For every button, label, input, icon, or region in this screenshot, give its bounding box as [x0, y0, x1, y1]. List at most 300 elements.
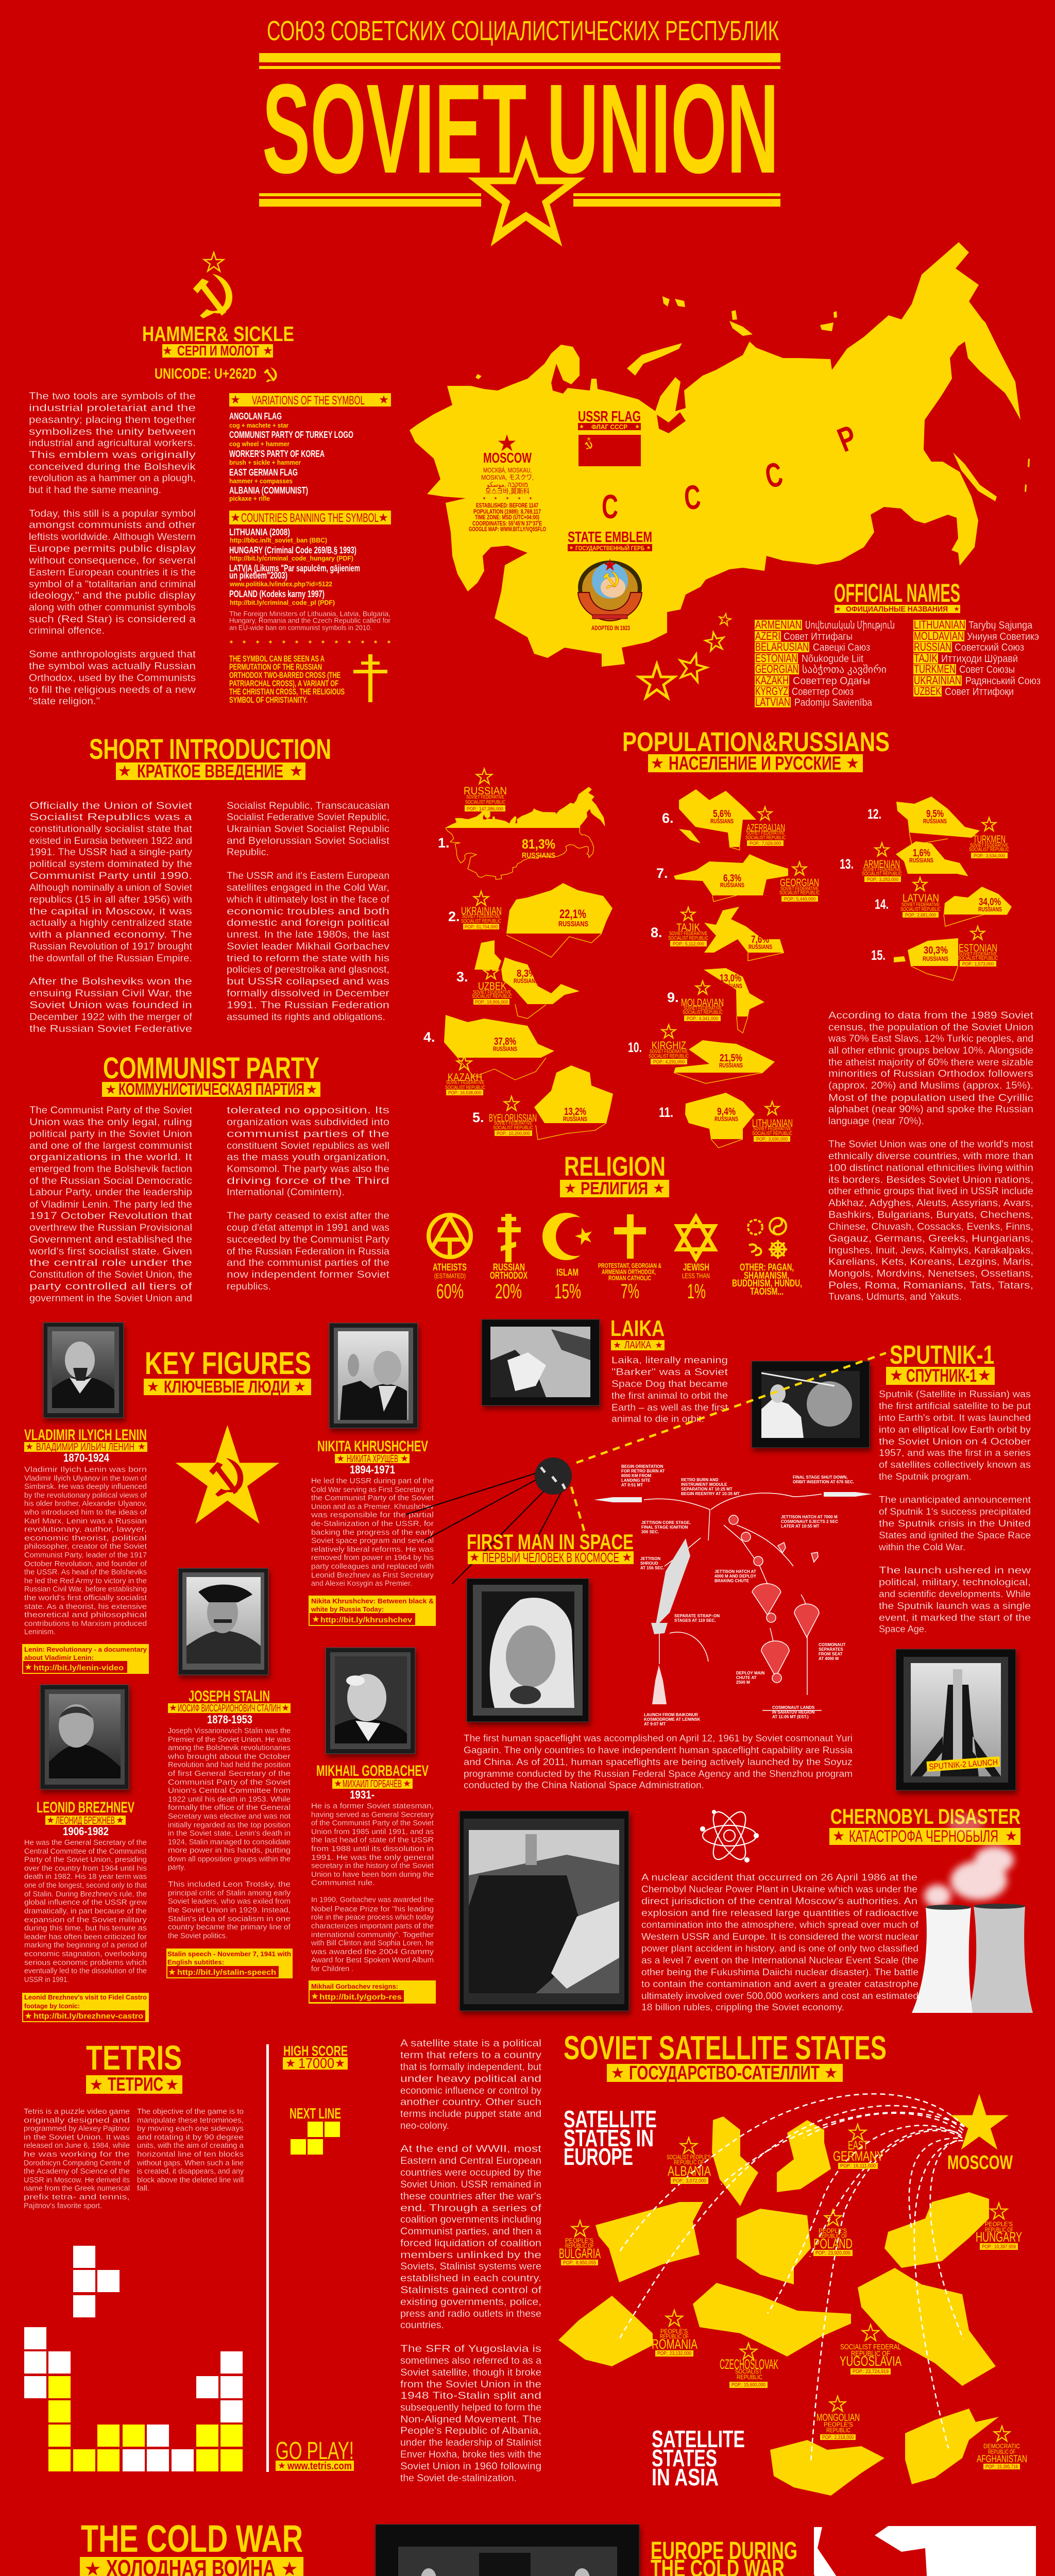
first man in space heading — [467, 1530, 634, 1565]
panel: hammer and sickle — [28, 322, 391, 707]
panel: short introduction: Socialist Republics was a — [29, 812, 193, 823]
panel: chernobyl: A nuclear accident that occurred on 26 April 1986 at the — [641, 1872, 917, 1883]
text block: eu ban: The Foreign Ministers of Lithuania, Latvia, Bulgaria, — [229, 609, 390, 618]
panel: communist party: of the Russian Federation in Russia — [227, 1246, 389, 1257]
figure: stalin: the Soviet Union in 1929. Instead, — [168, 1906, 291, 1914]
portrait: stalin — [178, 1568, 268, 1675]
text block: symbol history — [28, 391, 196, 707]
satellite subheadings: IN ASIA — [652, 2464, 719, 2490]
sputnik text: and scientific developments. While — [879, 1588, 1031, 1599]
republic labels: POP.: 16,538,000 — [448, 1090, 481, 1096]
panel: tetris: prefix tetra- and tennis, — [24, 2193, 130, 2201]
satellite subheadings: SATELLITE — [564, 2106, 657, 2132]
sputnik text: the Soviet Union on 4 October — [879, 1436, 1031, 1447]
text block: census: Abkhaz, Adyghes, Aleuts, Assyrians, Avars, — [828, 1198, 1033, 1209]
panel: official names: Սովետական Միություն — [805, 620, 895, 631]
text block: census: its borders. Besides Soviet Union nations, — [828, 1175, 1033, 1185]
republic percentages: 9,4% — [717, 1106, 736, 1117]
gagarin text: and China. As of 2011, human spaceflights are being actively launched by the Soyuz — [464, 1756, 853, 1767]
satellite country labels: PEOPLE'S — [819, 2227, 847, 2234]
moscow label: COORDINATES: 55°45′N 37°37′E — [472, 520, 542, 527]
panel: official names: TAJIK — [914, 652, 938, 665]
laika text: "Barker" was a Soviet — [611, 1366, 728, 1377]
panel: tetris: USSR in Moscow. He derived its — [24, 2176, 130, 2184]
gagarin text: programme conducted by the Russian Federal Space Agency and the Shenzhou program — [464, 1768, 853, 1779]
text block: symbol history: but it had the same meaning. — [29, 485, 161, 496]
variations list: cog + machete + star — [229, 421, 288, 429]
satellite country labels: PEOPLE'S — [660, 2328, 688, 2335]
flight diagram: CHUTE AT — [736, 1675, 757, 1680]
icons: other religions — [748, 1218, 787, 1259]
icon: star of david — [677, 1217, 714, 1259]
video link: lenin: Lenin: Revolutionary - a documentary — [24, 1646, 147, 1653]
figure: brezhnev: Party of the Soviet Union, presiding — [24, 1856, 147, 1864]
flight diagram: AT 156 SEC. — [640, 1566, 665, 1570]
republic numbers: 1. — [438, 835, 450, 851]
banning list: LATVIA (Likums "Par sapulcēm, gājieniem — [229, 563, 360, 573]
banning list: HUNGARY (Criminal Code 269/B.§ 1993) — [229, 545, 356, 555]
text block: satellite states: sometimes also referred to as a — [400, 2355, 541, 2366]
republic percentages: 34,0% — [979, 896, 1001, 908]
text block: satellite states: 1948 Tito-Stalin split and — [400, 2391, 541, 2401]
text block: census: ethnically diverse countries, with more than — [828, 1151, 1033, 1162]
republic percentages: 37,8% — [494, 1036, 516, 1047]
republic labels: SOVIET FEDERATIVE — [959, 952, 997, 957]
text block: satellite states: end. Through a series of — [400, 2203, 542, 2214]
panel: tetris: ТЕТРИС — [108, 2074, 163, 2095]
panel: communist party: Constitution of the Soviet Union, the — [29, 1269, 192, 1280]
sputnik text: the Sputnik program. — [879, 1471, 972, 1482]
figure: stalin: ИОСИФ ВИССАРИОНОВИЧ СТАЛИН — [178, 1703, 281, 1714]
panel: official names: AZERI — [755, 630, 780, 642]
laika text: Space Dog that became — [611, 1378, 728, 1389]
republic numbers: 11. — [659, 1105, 673, 1120]
state emblem — [568, 529, 652, 632]
panel: communist party: of Vladimir Lenin. The party led the — [29, 1199, 192, 1210]
text block: census: Chinese, Chuvash, Cossacks, Evenks, Finns, — [828, 1222, 1033, 1232]
flight diagram: FROM SEAT — [819, 1652, 843, 1656]
video link: khrushchev: white by Russia Today: — [311, 1605, 384, 1613]
variations list: brush + sickle + hammer — [229, 459, 301, 466]
satellite country labels: POP.: 2,318,000 — [822, 2435, 854, 2441]
ussr flag — [578, 435, 641, 466]
panel: communist party: the central role under the — [29, 1258, 192, 1268]
laika text: LAIKA — [610, 1316, 665, 1341]
text block: symbol history: amongst communists and other — [29, 520, 196, 531]
flight diagram: COSMONAUT LANDS — [772, 1705, 815, 1710]
panel: short introduction: policies of perestroika and glasnost, — [227, 964, 389, 975]
banning list: http://bit.ly/criminal_code_hungary (PDF) — [230, 554, 353, 562]
panel: official names: LITHUANIAN — [914, 618, 965, 631]
banning list: POLAND (Kodeks karny 1997) — [229, 589, 325, 599]
republic percentages: 5,6% — [713, 808, 731, 820]
figure: brezhnev: serious economic problems which — [24, 1959, 147, 1967]
panel: chernobyl: explosion and fire released large quantities of radioactive — [641, 1907, 918, 1918]
panel: communist party: republics. — [227, 1281, 271, 1292]
sputnik text: The unanticipated announcement — [879, 1494, 1031, 1505]
figure: brezhnev: leader has often been criticized for — [24, 1933, 147, 1941]
religion labels: JEWISH — [683, 1262, 709, 1273]
figure: brezhnev: during this time, but his tenure as — [24, 1924, 147, 1933]
republic labels: SOCIALIST REPUBLIC — [472, 994, 512, 999]
text block: satellite states: neo-colony. — [400, 2121, 449, 2131]
sputnik text: within the Cold War. — [878, 1541, 965, 1552]
satellite country labels: PEOPLE'S — [824, 2421, 853, 2428]
text block: symbol history: peasantry; placing them together — [29, 415, 196, 426]
icon: orthodox cross — [498, 1214, 521, 1262]
figure: khrushchev: Union and as a Premier. Khrushchev — [311, 1503, 434, 1511]
decorative stars — [639, 613, 731, 698]
satellite country labels: REPUBLIC OF — [660, 2333, 689, 2340]
satellite country labels: SOCIALIST — [735, 2368, 762, 2375]
text block: census: all other ethnic groups below 10%. Alongside — [828, 1045, 1033, 1056]
panel: short introduction: Russian Revolution of 1917 brought — [29, 941, 193, 952]
panel: official names: Униуня Советикэ — [967, 631, 1039, 642]
panel: key figures — [22, 1323, 436, 2022]
text block: census: other ethnic groups that lived in USSR include — [828, 1186, 1033, 1197]
text block: satellite states: Soviet Union in 1960 following — [400, 2461, 541, 2472]
figure: stalin: more power in his hands, putting — [168, 1846, 291, 1855]
satellite country labels: EAST — [848, 2139, 868, 2153]
republic numbers: 14. — [875, 896, 889, 912]
CCCP lettering: С — [683, 478, 702, 517]
star row — [229, 640, 391, 643]
flight diagram: SEPARATE STRAP–ON — [674, 1614, 720, 1618]
text block: satellite states: At the end of WWII, most — [400, 2144, 542, 2155]
republic labels: SOCIALIST REPUBLIC — [779, 890, 820, 896]
score and next line: www.tetris.com — [287, 2461, 352, 2472]
republic labels: POP.: 3,534,000 — [974, 853, 1005, 859]
republic labels: SOVIET FEDERATIVE — [446, 1080, 484, 1086]
CCCP lettering: С — [762, 454, 786, 495]
religion labels: TAOISM... — [750, 1286, 784, 1297]
panel: official names: Совет Союзы — [959, 664, 1015, 675]
tag: SPUTNIK-2 LAUNCH — [929, 1758, 998, 1772]
text block: satellite states: Non-Aligned Movement. The — [400, 2414, 541, 2425]
religion labels: 15% — [554, 1280, 581, 1303]
republic percentages: RUSSIANS — [720, 882, 744, 889]
text block: satellite states: the Soviet de-stalinization. — [400, 2473, 517, 2484]
text block: symbol history: conceived during the Bolshevik — [29, 462, 196, 472]
video link: khrushchev: http://bit.ly/khrushchev — [320, 1616, 413, 1624]
satellite country labels: CZECHOSLOVAK — [720, 2357, 778, 2372]
moscow label: TIME ZONE: MSD (UTC+04:00) — [475, 514, 539, 521]
panel: communist party: and the communist parties of the — [227, 1258, 389, 1268]
panel: short introduction: actually a highly centralized state — [29, 918, 192, 928]
panel: soviet satellite states: SOVIET SATELLITE STATES — [564, 2029, 887, 2066]
republic numbers: 5. — [472, 1110, 484, 1125]
republic percentages: RUSSIANS — [923, 818, 947, 825]
laika text — [610, 1316, 728, 1424]
panel: official names: ОФИЦИАЛЬНЫЕ НАЗВАНИЯ — [846, 605, 948, 614]
portrait: brezhnev — [40, 1685, 129, 1789]
score and next line: GO PLAY! — [276, 2437, 354, 2465]
figure: brezhnev: ЛЕОНИД БРЕЖНЕВ — [56, 1815, 115, 1826]
text block: satellite states: Soviet satellite, though it broke — [400, 2367, 541, 2378]
figure: gorbachev: from 1988 until its dissolution in — [311, 1845, 434, 1853]
text block: census: Mongols, Mordvins, Nenetses, Ossetians, — [828, 1268, 1033, 1279]
video link: stalin: English subtitles: — [167, 1958, 224, 1966]
text block: census: Gagauz, Germans, Greeks, Hungarians, — [828, 1233, 1033, 1244]
text block: census: census, the population of the Soviet Union — [828, 1022, 1033, 1033]
text block: symbol history: This emblem was originally — [29, 450, 196, 461]
panel: space race — [405, 1316, 1031, 1790]
video link: brezhnev: footage by Iconic: — [24, 2002, 80, 2010]
republic percentages: 13,0% — [720, 973, 741, 984]
heading: europe during the cold war: EUROPE DURING — [651, 2537, 797, 2565]
sputnik text: 1957, and was the first in a series — [879, 1447, 1031, 1458]
video link: lenin: http://bit.ly/lenin-video — [33, 1664, 124, 1672]
figure: khrushchev: 1894-1971 — [350, 1463, 395, 1476]
republic labels: SOCIALIST REPUBLIC — [668, 936, 708, 941]
religion labels: ROMAN CATHOLIC — [608, 1274, 651, 1282]
flight diagram: ORBIT INSERTION AT 676 SEC. — [793, 1480, 854, 1484]
panel: short introduction: Soviet Union was founded in — [29, 1000, 192, 1011]
figure: brezhnev: 1906-1982 — [63, 1825, 109, 1838]
republic labels: POP.: 7,029,000 — [750, 841, 781, 846]
satellite country labels: DEMOCRATIC — [983, 2443, 1020, 2450]
panel: short introduction: December 1922 with the merger of — [29, 1012, 193, 1023]
sputnik text: СПУТНИК-1 — [906, 1366, 977, 1386]
satellite country labels: REPUBLIC OF — [985, 2226, 1013, 2233]
text block: symbol history: industrial proletariat and the — [29, 403, 196, 414]
text block: orthodox cross note: THE CHRISTIAN CROSS, THE RELIGIOUS — [229, 687, 345, 697]
figure: lenin: 1870-1924 — [63, 1451, 110, 1464]
text block: symbol history: criminal offence. — [29, 625, 105, 636]
laika text: Laika, literally meaning — [611, 1354, 728, 1365]
figure: lenin: October Revolution, and founder of — [24, 1560, 147, 1568]
dashed arrows from moscow — [619, 2094, 964, 2463]
ussr flag label: ФЛАГ СССР — [591, 423, 627, 431]
figure: gorbachev: international community". Together — [311, 1931, 434, 1939]
panel: official names: საბჭოთა კავშირი — [802, 664, 887, 675]
republic labels: POP.: 5,112,000 — [673, 941, 704, 947]
figure: lenin: Leninism. — [24, 1628, 56, 1636]
panel: short introduction: satellites engaged in the Cold War, — [227, 883, 389, 893]
figure: khrushchev: and Alexei Kosygin as Premier. — [311, 1580, 412, 1588]
panel: official names: RUSSIAN — [914, 640, 951, 653]
republic labels: POP.: 3,283,000 — [867, 877, 898, 883]
panel: short introduction: 1991. The USSR had a single-party — [29, 847, 193, 858]
figure: khrushchev: He led the USSR during part of the — [311, 1477, 434, 1485]
text block: census: minorities of Russian Orthodox followers — [828, 1069, 1033, 1079]
text block: census: was 70% East Slavs, 12% Turkic peoples, and — [828, 1033, 1033, 1044]
score and next line: NEXT LINE — [290, 2106, 341, 2122]
panel: chernobyl: to contain the contamination and avert a greater catastrophe — [641, 1978, 918, 1989]
panel: short introduction: SHORT INTRODUCTION — [89, 733, 331, 765]
satellite country labels: POP.: 16,111,000 — [840, 2163, 876, 2169]
flight diagram: 8000 KM FROM — [621, 1473, 652, 1478]
satellite country labels: POP.: 23,724,919 — [853, 2369, 889, 2375]
panel: tetris: Pajitnov's favorite sport. — [24, 2202, 102, 2210]
republic labels: UKRAINIAN — [461, 905, 502, 917]
map: europe during the cold war — [510, 2526, 1036, 2576]
panel: communist party: Government and established the — [29, 1234, 192, 1245]
figure: brezhnev: global influence of the USSR grew — [24, 1899, 147, 1907]
sputnik text: Sputnik (Satellite in Russian) was — [879, 1388, 1031, 1399]
panel: chernobyl — [460, 1804, 1033, 2013]
panel: communist party: government in the Soviet Union and — [29, 1293, 192, 1304]
republic labels: SOCIALIST REPUBLIC — [958, 956, 998, 961]
video link: khrushchev: Nikita Khrushchev: Between black & — [311, 1597, 434, 1605]
panel: tetris: and rotating it by 90 degree — [137, 2133, 244, 2142]
panel: chernobyl: contamination into the atmosphere, which spread over much of — [641, 1919, 919, 1930]
flight diagram: SEPARATION AT 10:25 MT — [681, 1487, 733, 1492]
figure: khrushchev: relatively liberal reforms. He was — [311, 1546, 434, 1554]
photo: nixon and gorbachev — [376, 2524, 639, 2576]
republic labels: POP.: 51,704,000 — [465, 924, 498, 930]
religion labels: RUSSIAN — [493, 1262, 525, 1273]
republic labels: SOCIALIST REPUBLIC — [461, 919, 501, 924]
video link: gorbachev — [309, 1980, 436, 2004]
video link: brezhnev: http://bit.ly/brezhnev-castro — [33, 2012, 143, 2021]
panel: official names: OFFICIAL NAMES — [834, 579, 960, 607]
satellite subheadings — [564, 2106, 745, 2490]
flight diagram — [594, 1464, 872, 1726]
republic labels: ESTONIAN — [959, 942, 997, 954]
figure: lenin: he led the Red Army to victory in the — [24, 1577, 147, 1585]
panel: communist party: overthrew the Russian Provisional — [29, 1223, 192, 1233]
panel: official names: Совет Иттифагы — [784, 631, 853, 642]
figure: gorbachev: 1931- — [350, 1788, 375, 1801]
panel: short introduction: Ukrainian Soviet Socialist Republic — [227, 824, 389, 835]
flight diagram: BEGIN REENTRY AT 10:35 MT — [681, 1492, 740, 1496]
figure: gorbachev: Union from 1985 until 1991, and as — [311, 1828, 434, 1836]
panel: hammer and sickle: СЕРП И МОЛОТ — [177, 343, 259, 359]
figure: gorbachev: Nobel Peace Prize for "his leading — [311, 1905, 434, 1913]
panel: tetris: originally designed and — [24, 2116, 130, 2125]
panel: short introduction: the capital in Moscow, it was — [29, 906, 192, 917]
figure: brezhnev: dramatically, in part because of the — [24, 1907, 147, 1916]
panel: tetris: by moving each one sideways — [137, 2125, 244, 2133]
republic labels: KAZAKH — [448, 1072, 482, 1083]
figure: stalin: of first General Secretary of the — [168, 1770, 291, 1778]
figure: stalin: in the Soviet state, Lenin's death in — [168, 1829, 291, 1838]
republic percentages: RUSSIANS — [493, 1045, 517, 1053]
figure: gorbachev: He is a former Soviet statesman, — [311, 1802, 434, 1810]
panel: short introduction: republics (15 in all after 1956) with — [29, 894, 192, 905]
flight diagram: FINAL STAGE SHUT DOWN, — [793, 1475, 847, 1480]
panel: tetris: in the Soviet Union. It was — [24, 2133, 130, 2142]
figure: gorbachev: In 1990, Gorbachev was awarded the — [311, 1896, 434, 1904]
panel: official names: Tarybų Sąjunga — [968, 620, 1033, 631]
panel: religion: RELIGION — [564, 1151, 666, 1182]
text block: satellite states: forced liquidation of coalition — [400, 2238, 541, 2249]
republic labels: SOCIALIST REPUBLIC — [752, 1131, 792, 1137]
text block: satellite states: under heavy political and — [400, 2074, 541, 2084]
republic percentages: RUSSIANS — [563, 1115, 587, 1123]
text block: symbol history: Eastern European countries it is the — [29, 567, 196, 578]
icon: sputnik satellite — [405, 1458, 572, 1584]
satellite country labels: HUNGARY — [976, 2229, 1022, 2245]
panel: tetris: The objective of the game is to — [137, 2108, 244, 2116]
religion labels: 1% — [687, 1280, 706, 1303]
panel: official names: Совет Иттифоқи — [945, 686, 1014, 698]
satellite country labels: PEOPLE'S — [985, 2221, 1013, 2228]
panel: tetris: he was working for the — [24, 2150, 130, 2159]
flight diagram: COSMONAUT — [819, 1642, 846, 1647]
satellite country labels: REPUBLIC OF — [565, 2242, 594, 2249]
text block: satellite states: members unlinked by the — [400, 2250, 541, 2261]
republic percentages: 22,1% — [559, 907, 586, 921]
panel: communist party: emerged from the Bolshevik faction — [29, 1164, 192, 1175]
video link: brezhnev: Leonid Brezhnev's visit to Fidel Castro — [24, 1993, 147, 2001]
panel: chernobyl: ultimately involved over 500,000 workers and cost an estimated — [641, 1990, 918, 2001]
panel: chernobyl: Western USSR and Europe. It is considered the worst nuclear — [641, 1931, 918, 1942]
panel: official names: KAZAKH — [755, 674, 789, 687]
text block: census: Poles, Roma, Romanians, Tats, Tatars, — [828, 1280, 1033, 1291]
text block: satellite states: these countries after the war's — [400, 2191, 541, 2202]
photo: gagarin — [467, 1579, 589, 1722]
moscow label: ESTABLISHED: BEFORE 1147 — [476, 502, 538, 509]
figure: lenin: by the revolutionary political views of — [24, 1492, 147, 1500]
laika text: ЛАЙКА — [624, 1338, 652, 1351]
figure: stalin: 1924, Stalin managed to consolidate — [168, 1838, 291, 1846]
figure: lenin: Vladimir Ilyich Ulyanov in the town of — [24, 1475, 147, 1483]
text block: satellite states: that is formally independent, but — [400, 2062, 542, 2073]
panel: short introduction: which it ultimately lost in the face of — [226, 894, 390, 905]
text block: symbol history: Europe permits public display — [29, 544, 196, 554]
republic numbers: 6. — [662, 810, 674, 826]
religion labels: PROTESTANT, GEORGIAN & — [598, 1262, 661, 1269]
religion labels: BUDDHISM, HUNDU, — [732, 1278, 802, 1289]
figure: stalin: country became the primary line of — [168, 1923, 291, 1931]
panel: short introduction: assumed its rights and obligations. — [227, 1012, 385, 1023]
satellite subheadings: STATES IN — [564, 2125, 654, 2151]
satellite country labels: POP.: 15,600,000 — [731, 2382, 765, 2388]
figure: stalin: Union's Central Committee from — [168, 1787, 291, 1795]
photo: laika — [482, 1319, 600, 1405]
satellite country labels: REPUBLIC — [737, 2374, 762, 2381]
satellite country labels — [559, 2124, 1027, 2470]
moscow label: MOSCOW — [483, 450, 532, 466]
sputnik text: States and ignited the Space Race — [879, 1530, 1031, 1540]
republic numbers: 12. — [867, 806, 881, 822]
satellite subheadings: STATES — [652, 2445, 717, 2471]
flight diagram: AT 11:05 MT (EST.) — [772, 1715, 809, 1719]
text block: satellite states: existing governments, police, — [400, 2297, 541, 2308]
panel: chernobyl: direct jurisdiction of the central Moscow's authorities. An — [641, 1895, 917, 1906]
figure: brezhnev: He was the General Secretary of the — [24, 1839, 147, 1847]
figure: khrushchev: the Communist Party of the Soviet — [311, 1494, 434, 1502]
moscow label: POPULATION (1989): 8,769,117 — [473, 508, 541, 515]
figure: lenin: state. As a theorist, his extensive — [24, 1603, 147, 1611]
banning list: http://bit.ly/criminal_code_pl (PDF) — [230, 599, 335, 606]
sputnik text: political, military, technological, — [879, 1577, 1031, 1587]
figure: stalin: the Soviet politics. — [168, 1932, 228, 1940]
panel: chernobyl: Chernobyl Nuclear Power Plant in Ukraine which was under the — [641, 1884, 917, 1894]
figure: lenin: Vladimir Ilyich Lenin was born — [24, 1466, 147, 1474]
republic labels: SOVIET FEDERATIVE — [473, 990, 511, 995]
panel: official names: Padomju Savienība — [794, 697, 873, 708]
text block: symbol history: along with other communist symbols — [29, 602, 196, 613]
figure: gorbachev — [309, 1762, 436, 2004]
figure: lenin: philosopher, creator of the Soviet — [24, 1543, 147, 1551]
republic labels: SOVIET FEDERATIVE — [746, 831, 785, 836]
dashed orbit lines — [571, 1353, 886, 1534]
figure: lenin — [22, 1427, 149, 1674]
panel: communist party: driving force of the Third — [227, 1176, 389, 1187]
text block: satellite states: Soviets, Stalinist systems were — [400, 2261, 541, 2272]
panel: communist party: political party in the Soviet Union — [29, 1129, 192, 1140]
figure: brezhnev: Central Committee of the Communist — [24, 1848, 147, 1856]
figure: gorbachev: for Children . — [311, 1965, 353, 1973]
ussr flag label — [578, 409, 641, 466]
panel: short introduction: domestic and foreign political — [227, 918, 389, 928]
panel: soviet satellite states: ГОСУДАРСТВО-САТЕЛЛИТ — [629, 2062, 820, 2084]
flight diagram: AT 9:51 MT — [621, 1483, 643, 1487]
figure: lenin: Russian Civil War, before establishing — [24, 1585, 147, 1594]
